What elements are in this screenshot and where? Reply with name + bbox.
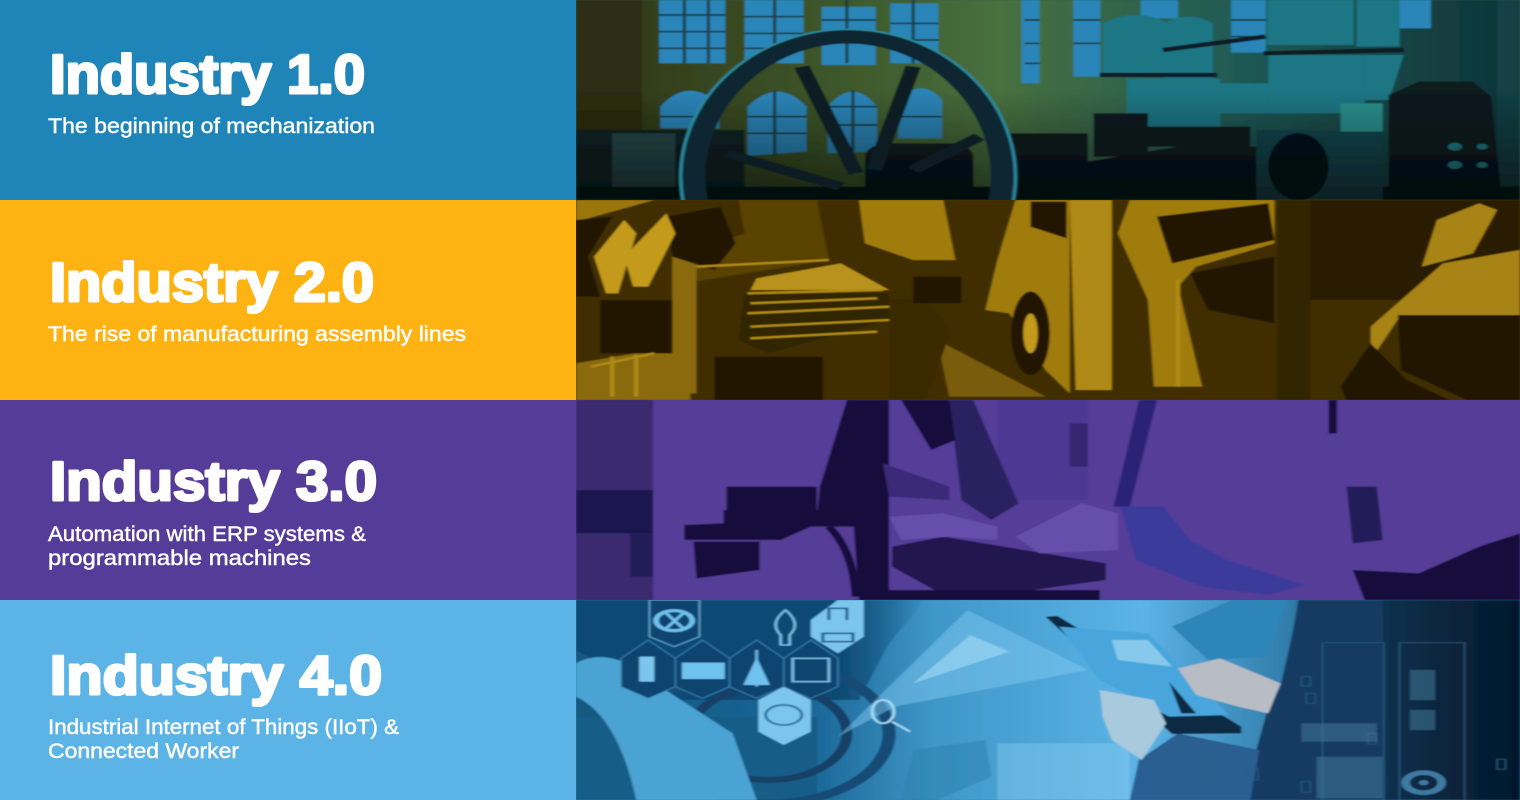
panel: Industry 3.0 bbox=[0, 400, 576, 600]
text: Industry 4.0 description: Connected Worker bbox=[48, 740, 239, 763]
panel: Industry 2.0 bbox=[0, 200, 576, 400]
heading: Industry 2.0: Industry 2.0 bbox=[50, 251, 374, 313]
flywheel bbox=[681, 29, 1015, 324]
photo: steam engine flywheel hall bbox=[576, 0, 1520, 200]
text: Industry 1.0 description: The beginning of mechanization bbox=[48, 115, 375, 138]
photo: operator at machine console bbox=[576, 400, 1520, 600]
icon hexes bbox=[621, 600, 864, 745]
tablet bbox=[1046, 616, 1241, 734]
text: Industry 2.0 description: The rise of manufacturing assembly lines bbox=[48, 323, 466, 346]
heading: Industry 4.0: Industry 4.0 bbox=[50, 644, 382, 706]
panel: Industry 4.0 bbox=[0, 600, 576, 800]
data panels and gear bbox=[1202, 643, 1506, 800]
light beam bbox=[838, 610, 1088, 737]
suit bbox=[1130, 600, 1386, 800]
text: Industry 3.0 description bbox=[48, 523, 366, 570]
text: Industry 3.0 description: Automation with ERP systems & bbox=[48, 523, 366, 546]
heading: Industry 3.0: Industry 3.0 bbox=[50, 450, 377, 512]
text: Industry 4.0 description: Industrial Internet of Things (IIoT) & bbox=[48, 716, 399, 739]
hands bbox=[1178, 658, 1280, 713]
machinery bodies bbox=[1103, 0, 1404, 133]
photo: connected worker with tablet bbox=[576, 600, 1520, 800]
text: Industry 3.0 description: programmable machines bbox=[48, 547, 311, 570]
text: Industry 4.0 description bbox=[48, 716, 399, 763]
heading: Industry 1.0: Industry 1.0 bbox=[50, 43, 365, 105]
photo: car assembly line bbox=[576, 200, 1520, 400]
panel: Industry 1.0 bbox=[0, 0, 576, 200]
